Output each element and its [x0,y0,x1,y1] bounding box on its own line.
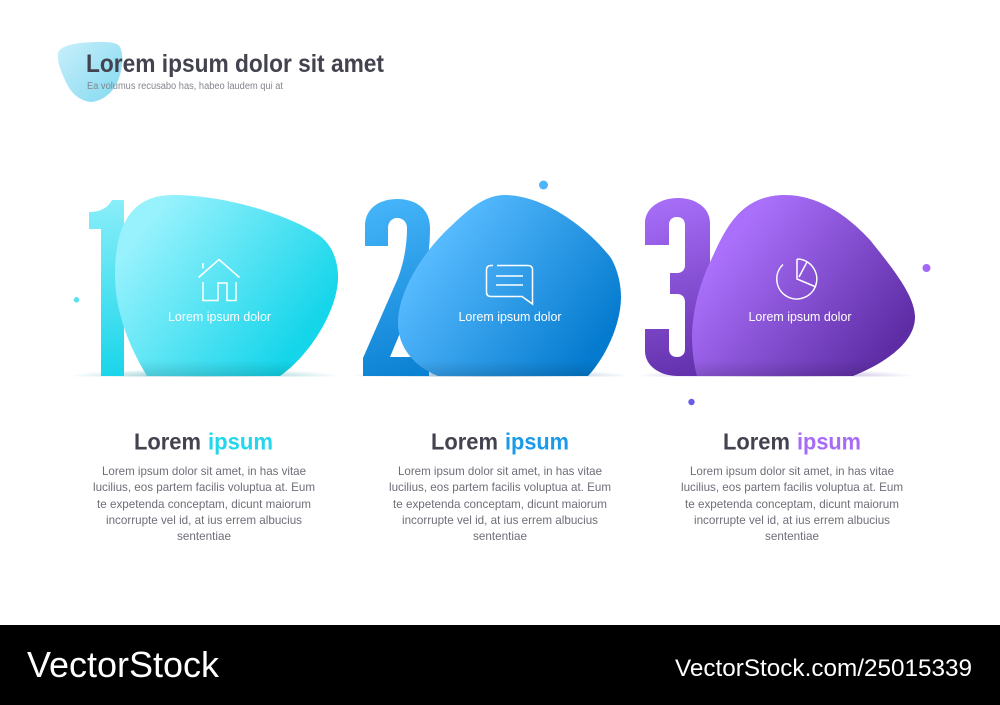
body 2: lucilius, eos partem facilis voluptua at. Eum [389,480,611,494]
blob 2 bottom shade [419,364,596,376]
body 3: sententiae [765,529,819,543]
body 3: lucilius, eos partem facilis voluptua at. Eum [681,480,903,494]
text column 2 [389,428,611,543]
blob 3 [692,195,915,376]
body 1: Lorem ipsum dolor sit amet, in has vitae [102,464,306,478]
body 1: te expetenda conceptam, dicunt maiorum [97,497,311,511]
heading 1: Lorem [134,428,201,454]
blob 3 bottom shade [694,364,872,376]
blob 1 bottom shade [140,364,293,376]
ground shadow 3 [645,372,904,376]
step 2 graphic [350,195,630,383]
label 3: Lorem ipsum dolor [748,310,852,324]
blob 2 [398,195,621,376]
body 2: te expetenda conceptam, dicunt maiorum [393,497,607,511]
body 3: te expetenda conceptam, dicunt maiorum [685,497,899,511]
body 2 [389,464,611,543]
header: title block with blob [58,42,385,102]
body 3: incorrupte vel id, at ius errem albucius [694,513,890,527]
icon: house [198,260,240,300]
icon: pie chart [777,259,817,299]
body 2: incorrupte vel id, at ius errem albucius [402,513,598,527]
label 2: Lorem ipsum dolor [458,310,562,324]
header blob [58,42,122,102]
body 2: sententiae [473,529,527,543]
body 1: incorrupte vel id, at ius errem albucius [106,513,302,527]
numeral 2 [363,199,430,376]
body 1: sententiae [177,529,231,543]
heading 2 accent: ipsum [505,428,569,454]
title: Lorem ipsum dolor sit amet [86,50,385,78]
label 1: Lorem ipsum dolor [168,310,271,324]
text column 3 [681,428,903,543]
step 1 graphic [69,195,345,383]
subtitle: Ea volumus recusabo has, habeo laudem qui at [87,81,283,92]
heading 3: Lorem [723,428,790,454]
watermark bar [0,625,1000,705]
body 1 [93,464,315,543]
numeral 3 [645,198,710,376]
body 3 [681,464,903,543]
body 3: Lorem ipsum dolor sit amet, in has vitae [690,464,894,478]
heading 1 accent: ipsum [208,428,273,454]
heading 3 accent: ipsum [797,428,861,454]
ground shadow 1 [78,370,332,376]
body 2: Lorem ipsum dolor sit amet, in has vitae [398,464,602,478]
bar background [0,625,1000,705]
numeral 1 [89,200,124,376]
heading 2: Lorem [431,428,498,454]
VectorStock logo text: VectorStock [27,644,220,685]
icon: speech bubble [486,266,532,304]
blob 1 [115,195,338,376]
step 3 graphic [635,195,920,383]
decorative dots [74,180,930,405]
ground shadow 2 [359,372,622,376]
text column 1 [93,428,315,543]
body 1: lucilius, eos partem facilis voluptua at. Eum [93,480,315,494]
VectorStock URL: VectorStock.com/25015339 [675,655,972,682]
